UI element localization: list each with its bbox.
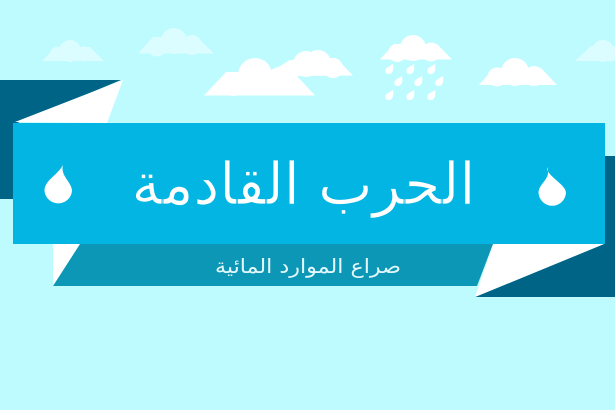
title: الحرب القادمة bbox=[132, 150, 476, 219]
icon: right water drop bbox=[538, 167, 566, 206]
icon: faint cloud far right bbox=[575, 40, 615, 62]
icon: rain drops bbox=[385, 64, 443, 100]
icon: white cloud large bbox=[204, 50, 353, 96]
icon: left water drop bbox=[44, 165, 72, 203]
subtitle fold: white left bbox=[53, 244, 81, 286]
icon: rain cloud bbox=[380, 35, 452, 100]
icon: faint cloud centre-left bbox=[138, 28, 214, 56]
ribbon fold: dark right bbox=[475, 156, 615, 297]
subtitle band bbox=[53, 244, 493, 286]
icon: faint cloud left bbox=[42, 40, 104, 62]
ribbon fold: white left bbox=[15, 80, 123, 123]
ribbon fold: white right bbox=[475, 244, 604, 297]
icon: white cloud right bbox=[479, 58, 557, 86]
subtitle: صراع الموارد المائية bbox=[215, 254, 401, 278]
main banner bbox=[13, 123, 605, 244]
ribbon fold: dark left bbox=[0, 80, 121, 199]
